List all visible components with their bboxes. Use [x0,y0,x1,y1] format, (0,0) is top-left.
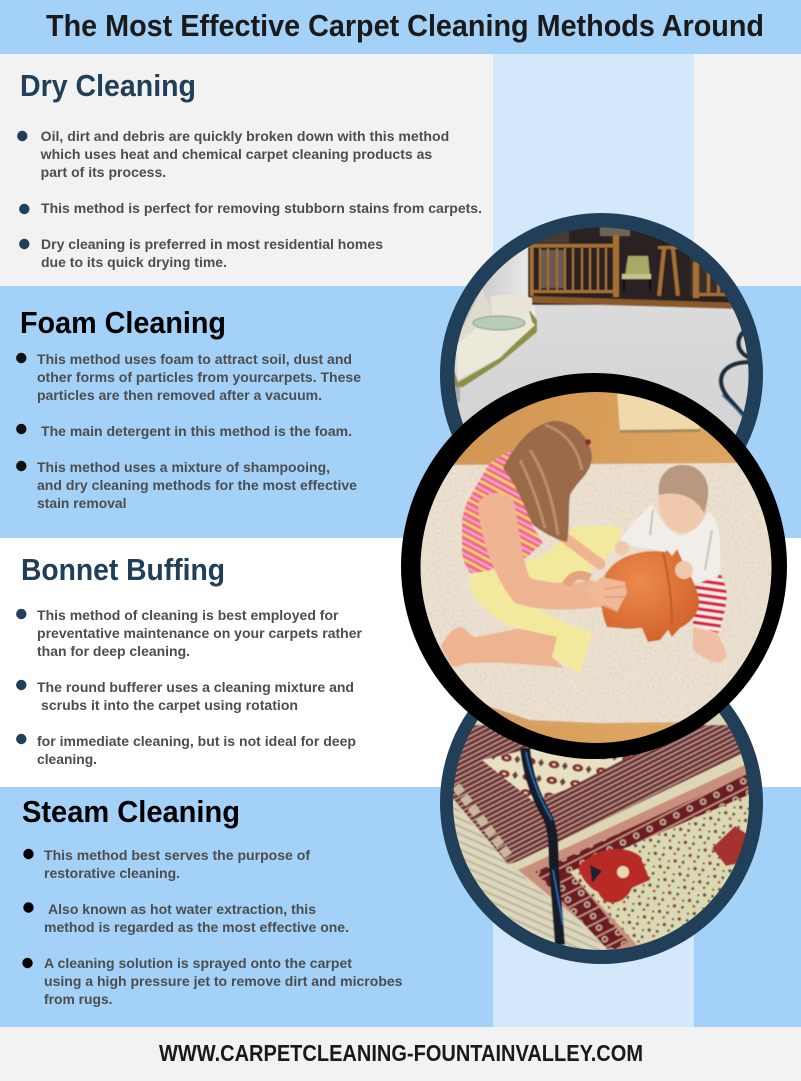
railing [528,235,740,298]
bullet group: dry 1: part of its process. [41,164,166,180]
bullet group: dry 1: Oil, dirt and debris are quickly broken down with this method [41,128,449,144]
baby: pants [692,573,727,633]
panel: bonnet buffing [0,538,801,787]
hands [596,576,628,612]
heading: foam cleaning: Foam Cleaning [20,305,226,340]
girl: arm [478,492,602,610]
bullet group: steam 1: This method best serves the purpose of [44,847,310,863]
bullet group: foam 1: other forms of particles from yourcarpets. These [37,369,361,385]
bullet group: bonnet 1 [16,607,363,659]
bullet group: foam 2: The main detergent in this method is the foam. [41,423,352,439]
bullet group: bonnet 2: scrubs it into the carpet using rotation [41,697,298,713]
bullet group: bonnet 3: for immediate cleaning, but is not ideal for deep [37,733,356,749]
baby: head [658,493,708,534]
heading: bonnet buffing: Bonnet Buffing [21,552,225,587]
hose [721,328,750,418]
bullet group: dry 3 [19,236,383,270]
bullet group: steam 3 [22,955,403,1007]
bullet group: foam 3: This method uses a mixture of shampooing, [37,459,330,475]
bullet group: steam 1: restorative cleaning. [44,865,180,881]
bullet group: foam 1: This method uses foam to attract soil, dust and [37,351,352,367]
bullet group: foam 3: stain removal [37,495,126,511]
panel: dry cleaning [0,54,801,286]
vertical light strip behind circles [493,54,694,1027]
bullet group: dry 1 [17,128,449,180]
hose [525,748,560,945]
bullet group: bonnet 3: cleaning. [37,751,97,767]
sofa [454,308,537,387]
footer band [0,1027,801,1081]
carpet [415,463,775,723]
chair [625,256,650,276]
bullet group: steam 2 [23,901,349,935]
bullet group: bonnet 3 [16,733,356,767]
bullet group: steam 3: using a high pressure jet to remove dirt and microbes [44,973,403,989]
bullet group: bonnet 1: than for deep cleaning. [37,643,190,659]
title: The Most Effective Carpet Cleaning Methods Around [46,8,764,43]
baby: shirt [620,505,720,583]
bullet group: bonnet 1: preventative maintenance on your carpets rather [37,625,363,641]
panel: steam cleaning [0,787,801,1027]
photo circle: oriental rugs with hose [440,704,763,964]
bullet group: bonnet 2: The round bufferer uses a cleaning mixture and [37,679,354,695]
girl: yellow pants [470,526,622,673]
girl: hair [503,421,592,542]
bullet group: steam 1 [23,847,310,881]
bullet group: steam 3: from rugs. [44,991,112,1007]
header band [0,0,801,54]
girl: leg [441,627,564,668]
bullet group: foam 1 [16,351,361,403]
bullet group: bonnet 1: This method of cleaning is best employed for [37,607,339,623]
bullet group: dry 3: due to its quick drying time. [41,254,227,270]
footer url: WWW.CARPETCLEANING-FOUNTAINVALLEY.COM [159,1040,643,1066]
bullet group: foam 1: particles are then removed after a vacuum. [37,387,322,403]
bullet group: steam 3: A cleaning solution is sprayed onto the carpet [44,955,352,971]
cushion on floor [617,392,700,431]
heading: steam cleaning: Steam Cleaning [22,794,240,829]
bullet group: steam 2: Also known as hot water extraction, this [48,901,316,917]
heading: dry cleaning: Dry Cleaning [20,68,196,103]
girl: shirt [462,447,543,573]
bullet group: dry 3: Dry cleaning is preferred in most residential homes [41,236,383,252]
bullet group: dry 2: This method is perfect for removing stubborn stains from carpets. [41,200,482,216]
bullet group: foam 3: and dry cleaning methods for the most effective [37,477,357,493]
bullet group: bonnet 2 [16,679,354,713]
photo circle: children on shag carpet with piggy bank [401,373,787,759]
baby: foot [693,627,727,663]
piggy bank [601,549,699,642]
bullet group: dry 1: which uses heat and chemical carpet cleaning products as [40,146,432,162]
photo circle: cleaned room with sofa [440,213,763,447]
bullet group: steam 2: method is regarded as the most effective one. [44,919,349,935]
panel: foam cleaning [0,286,801,538]
bullet group: foam 3 [16,459,357,511]
